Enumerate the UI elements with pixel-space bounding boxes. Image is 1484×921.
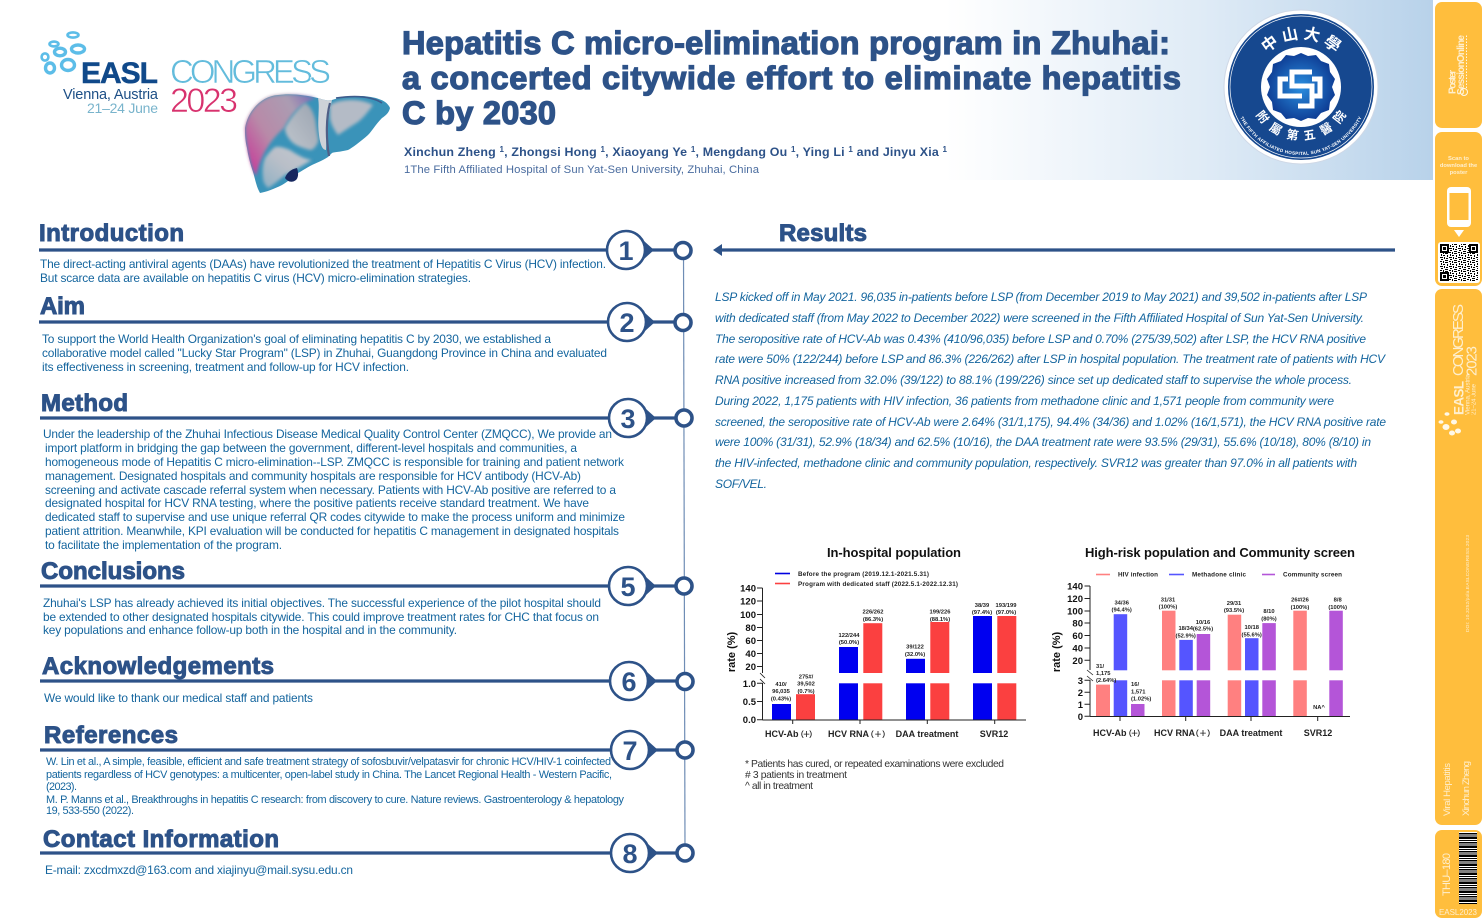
data labels: (50.0%)	[839, 640, 859, 646]
data labels: NA^	[1313, 705, 1325, 711]
data labels: 199/226	[930, 610, 951, 616]
section marker 6	[40, 662, 693, 700]
chart title: In-hospital population	[827, 545, 961, 560]
header background band	[0, 0, 1433, 180]
text: references list	[46, 756, 625, 817]
x axis: HCV RNA	[828, 729, 870, 739]
text: conclusions body	[43, 596, 601, 637]
y axis: rate (%)	[1051, 631, 1063, 672]
authors: 1	[791, 145, 796, 154]
panel: results	[713, 220, 1395, 491]
data labels: 38/39	[975, 603, 990, 609]
icon: Sun Yat-Sen University hospital emblem: 五	[1302, 127, 1317, 143]
authors: 1	[943, 145, 948, 154]
data labels: 16/	[1131, 682, 1139, 688]
legend: Community screen	[1283, 572, 1342, 578]
data labels: (0.7%)	[797, 689, 815, 695]
text: method body	[43, 427, 625, 552]
heading: aim: Aim	[40, 293, 85, 320]
data labels: (52.9%)	[1176, 634, 1196, 640]
text: references list: patients regardless of HCV genotypes: a multicenter, open-label study in China. The Lancet Regional Health - Western Pacific,	[46, 769, 612, 781]
footnotes	[745, 759, 1004, 792]
emblem symbol	[1280, 72, 1320, 106]
title	[402, 25, 1181, 131]
x axis: （＋）	[866, 730, 890, 739]
icon: Sun Yat-Sen University hospital emblem: 大	[1302, 25, 1322, 46]
text: method body: homogeneous mode of Hepatitis C micro-elimination--LSP. ZMQCC is responsible for training and patient network	[45, 455, 624, 469]
title: C by 2030	[402, 95, 556, 131]
section marker 5	[40, 567, 692, 605]
section marker 8	[40, 834, 693, 872]
data labels: 39,502	[797, 682, 815, 688]
text: introduction body: The direct-acting antiviral agents (DAAs) have revolutionized the treatment of Hepatitis C Virus (HCV) infection.	[40, 257, 606, 271]
legend: HIV infection	[1118, 572, 1158, 578]
text: results body: During 2022, 1,175 patients with HIV infection, 36 patients from methadone clinic and 1,571 people from community were	[715, 394, 1334, 408]
data labels: 34/36	[1114, 601, 1130, 607]
timeline connector	[684, 250, 685, 853]
y axis	[726, 584, 765, 726]
data labels: (94.4%)	[1112, 607, 1132, 613]
footnotes: # 3 patients in treatment	[745, 770, 847, 781]
data labels: 31/	[1096, 664, 1104, 670]
y axis: 140	[1067, 582, 1083, 592]
text: references list: W. Lin et al., A simple, feasible, efficient and safe treatment strategy of sofosbuvir/velpatasvir for chronic HCV/HIV-1 coinfected	[46, 756, 611, 768]
heading: acknowledgements: Acknowledgements	[42, 653, 274, 680]
data labels: (32.0%)	[905, 652, 925, 658]
year 2023: 2023	[170, 82, 238, 120]
data labels: 226/262	[863, 610, 883, 616]
panel: congress details	[1435, 289, 1482, 825]
panel: congress details: 21–24 June	[1472, 383, 1478, 415]
data labels: (93.5%)	[1224, 608, 1244, 614]
dates: 21–24 June	[87, 100, 158, 116]
y axis: 0	[1078, 712, 1083, 723]
text: results body: RNA positive increased from 32.0% (39/122) to 88.1% (199/226) since set up dedicated staff to supervise the whole process.	[715, 373, 1352, 387]
panel: poster number and barcode: EASL2023	[1439, 908, 1478, 917]
data labels: 410/	[775, 682, 787, 688]
bars	[1096, 611, 1343, 716]
y axis: 120	[1067, 594, 1083, 605]
data labels: 26#/26	[1291, 598, 1310, 604]
text: method body: designated hospital for HCV RNA testing, where the positive patients receive standard treatment. We have	[45, 496, 589, 510]
text: method body: Under the leadership of the Zhuhai Infectious Disease Medical Quality Control Center (ZMQCC), We provide an	[43, 427, 612, 441]
panel: congress details: DOI: 10.3252/pola.EASLCONGRESS.2023	[1465, 535, 1471, 632]
text: results body: with dedicated staff (from May 2022 to December 2022) were screened in the Fifth Affiliated Hospital of Sun Yat-Sen University.	[715, 311, 1364, 325]
EASL wordmark: EASL	[81, 57, 158, 90]
text: results body: rate were 50% (122/244) before LSP and 86.3% (226/262) after LSP in hospital population. The treatment rate of patients with HCV	[715, 352, 1386, 366]
panel: acknowledgements	[40, 653, 693, 705]
sidebar: EASL poster tab	[1435, 2, 1482, 918]
panel: scan to download	[1435, 132, 1482, 286]
text: conclusions body: Zhuhai's LSP has already achieved its initial objectives. The successful experience of the pilot hospital should	[43, 596, 601, 610]
text: method body: import platform in bridging the gap between the government, different-level hospitals and communities, a	[45, 441, 577, 455]
y axis	[1051, 582, 1093, 723]
legend	[1096, 572, 1342, 578]
icon: Sun Yat-Sen University hospital emblem	[1224, 10, 1378, 164]
authors: , Mengdang Ou	[695, 145, 791, 159]
legend: Program with dedicated staff (2022.5.1-2022.12.31)	[798, 581, 958, 588]
section marker 2: 2	[619, 308, 635, 338]
data labels: 96,035	[772, 689, 791, 695]
panel: poster session online	[1435, 2, 1482, 128]
authors: 1	[848, 145, 853, 154]
data labels: 18/34	[1178, 626, 1194, 632]
y axis: 80	[1072, 618, 1083, 630]
x axis: HCV-Ab	[765, 729, 799, 739]
section marker 1: 1	[618, 236, 634, 266]
bar chart: in-hospital population	[726, 545, 1026, 739]
panel: references	[40, 722, 693, 817]
data labels: 193/199	[996, 603, 1017, 609]
panel: aim	[39, 293, 691, 374]
data labels: 39/122	[906, 644, 924, 650]
y axis: 40	[1072, 644, 1083, 654]
icon: Sun Yat-Sen University hospital emblem: 院	[1330, 108, 1349, 126]
data labels: (100%)	[1291, 605, 1309, 611]
section marker 8: 8	[622, 839, 638, 869]
y axis: 140	[740, 584, 756, 594]
data labels: 275#/	[799, 674, 814, 680]
text: results body: screened, the seropositive rate of HCV-Ab were 2.64% (31/1,175), 94.4% (34/36) and 1.02% (16/1,571), the HCV RNA positive rate	[715, 415, 1386, 429]
y axis: 40	[745, 649, 756, 660]
authors: , Ying Li	[796, 145, 848, 159]
data labels: 29/31	[1227, 601, 1242, 607]
panel: poster number and barcode	[1435, 830, 1482, 918]
heading: method: Method	[41, 390, 128, 417]
data labels: 10/16	[1196, 620, 1211, 626]
text: method body: management. Designated hospitals and community hospitals are responsible for HCV antibody (HCV-Ab)	[45, 469, 581, 483]
EASL Congress logo	[42, 32, 331, 120]
panel: congress details: 2023	[1464, 346, 1480, 376]
section marker 7: 7	[622, 736, 638, 766]
x axis: （＋）	[796, 730, 816, 739]
bar chart: high-risk population and community screen	[1051, 545, 1355, 738]
y axis: 100	[1067, 606, 1083, 618]
y axis: 120	[740, 596, 756, 608]
y axis: 3	[1078, 676, 1083, 687]
x axis: HCV RNA	[1154, 728, 1196, 738]
y axis: 1	[1078, 700, 1084, 711]
section marker 2	[39, 303, 691, 341]
legend	[775, 571, 958, 588]
text: results body: were 100% (31/31), 52.9% (18/34) and 62.5% (10/16), the DAA treatment rate were 93.5% (29/31), 55.6% (10/18), 80% (8/10) in	[715, 435, 1371, 449]
bars	[772, 616, 1016, 720]
text: conclusions body: be extended to other designated hospitals citywide. This could improve treatment rates for CHC that focus on	[43, 610, 599, 624]
data labels: (55.6%)	[1242, 633, 1262, 639]
panel: scan to download: Scan to	[1448, 156, 1469, 162]
y axis: 20	[745, 662, 756, 673]
text: results body: SOF/VEL.	[715, 477, 767, 491]
text: acknowledgements body: We would like to thank our medical staff and patients	[44, 691, 313, 705]
text: method body: to facilitate the implementation of the program.	[45, 538, 282, 552]
panel: poster session online: SessionOnline	[1456, 35, 1467, 95]
authors: 1	[691, 145, 696, 154]
icon: liver illustration	[245, 94, 390, 193]
x axis: DAA treatment	[1220, 728, 1282, 738]
panel: congress details: Vienna, Austria	[1464, 373, 1472, 415]
data labels: (2.64%)	[1096, 678, 1116, 684]
legend: Methadone clinic	[1192, 572, 1246, 578]
title: Hepatitis C micro-elimination program in Zhuhai:	[402, 25, 1170, 61]
x axis	[762, 720, 1026, 739]
icon: Sun Yat-Sen University hospital emblem: 附	[1253, 108, 1272, 126]
x axis: SVR12	[1304, 728, 1332, 738]
text: results body: the HIV-infected, methadone clinic and community population, respectively. SVR12 was greater than 97.0% in all patients with	[715, 456, 1357, 470]
data labels: 10/18	[1244, 625, 1260, 631]
icon: Sun Yat-Sen University hospital emblem: THE FIFTH AFFILIATED HOSPITAL SUN YAT-SEN UNIVERSITY	[1240, 116, 1362, 155]
data labels: (62.5%)	[1193, 627, 1213, 633]
QR code	[1438, 242, 1480, 283]
panel: congress details: Viral Hepatitis	[1442, 763, 1453, 816]
title: a concerted citywide effort to eliminate hepatitis	[402, 60, 1181, 96]
x axis	[1090, 716, 1350, 738]
panel: congress details: CONGRESS	[1450, 304, 1467, 376]
y axis: 2	[1078, 688, 1083, 699]
panel: method	[40, 390, 692, 552]
text: method body: screening and activate cascade referral system when necessary. Patients with HCV-Ab positive are referred to a	[45, 483, 616, 497]
x axis: HCV-Ab	[1093, 728, 1127, 738]
icon: Sun Yat-Sen University hospital emblem: 第	[1285, 126, 1300, 143]
data labels: (100%)	[1159, 605, 1177, 611]
section marker 3: 3	[620, 404, 636, 434]
icon: Sun Yat-Sen University hospital emblem: 山	[1280, 25, 1300, 46]
section marker 3	[40, 399, 692, 437]
icon: hexagon cluster	[42, 32, 84, 73]
arrow: results header rule	[713, 244, 1395, 256]
section marker 1	[39, 231, 691, 269]
icon: Sun Yat-Sen University hospital emblem: 中	[1258, 32, 1282, 56]
authors: , Xiaoyang Ye	[605, 145, 691, 159]
text: results body	[715, 290, 1386, 491]
data labels: (97.0%)	[996, 610, 1016, 616]
text: introduction body	[40, 257, 606, 285]
text: references list: 19, 533-550 (2022).	[46, 805, 134, 817]
icon: Sun Yat-Sen University hospital emblem: 學	[1320, 32, 1344, 56]
data labels: 1,175	[1096, 671, 1111, 677]
y axis: 60	[745, 636, 756, 647]
panel: contact information	[40, 826, 693, 877]
text: references list: (2023).	[46, 781, 77, 793]
section marker 5: 5	[620, 572, 636, 602]
data labels	[1096, 597, 1347, 711]
text: results body: The seropositive rate of HCV-Ab was 0.43% (410/96,035) before LSP and 0.70% (275/39,502) after LSP, the HCV RNA positive	[715, 332, 1366, 346]
icon: Sun Yat-Sen University hospital emblem: 屬	[1267, 120, 1285, 138]
footnotes: ^ all in treatment	[745, 781, 813, 792]
data labels: (80%)	[1261, 617, 1277, 623]
heading: contact information: Contact Information	[43, 826, 279, 853]
footnotes: * Patients has cured, or repeated examinations were excluded	[745, 759, 1004, 770]
heading: results: Results	[779, 220, 867, 247]
section marker 7	[40, 731, 693, 769]
text: method body: patient attrition. Meanwhile, KPI evaluation will be conducted for hepatitis C management in designated hospitals	[45, 524, 619, 538]
y axis: 60	[1072, 631, 1083, 642]
affiliation: 1The Fifth Affiliated Hospital of Sun Yat-Sen University, Zhuhai, China	[404, 164, 760, 176]
x axis: （＋）	[1124, 729, 1144, 738]
panel: congress details: EASL	[1452, 381, 1466, 415]
data labels: 1,571	[1131, 690, 1146, 696]
chart title: High-risk population and Community screen	[1085, 545, 1355, 560]
panel: congress details: Xinchun Zheng	[1461, 761, 1472, 816]
x axis: SVR12	[980, 729, 1008, 739]
legend: Before the program (2019.12.1-2021.5.31)	[798, 571, 929, 578]
x axis: （＋）	[1191, 729, 1215, 738]
authors: and Jinyu Xia	[853, 145, 942, 159]
heading: introduction: Introduction	[39, 220, 184, 247]
authors: Xinchun Zheng	[404, 145, 496, 159]
icon: hexagon cluster	[1438, 412, 1461, 436]
text: aim body: To support the World Health Organization's goal of eliminating hepatitis C by 2030, we established a	[42, 332, 551, 346]
data labels: (88.1%)	[930, 617, 950, 623]
panel: introduction	[39, 220, 691, 285]
data labels: (1.02%)	[1131, 697, 1151, 703]
text: aim body: collaborative model called "Lucky Star Program" (LSP) in Zhuhai, Guangdong Province in China and evaluated	[42, 346, 607, 360]
authors: 1	[601, 145, 606, 154]
y axis: 100	[740, 610, 756, 621]
data labels: 122/244	[839, 633, 860, 639]
section marker 6: 6	[621, 667, 637, 697]
data labels: 8/10	[1263, 609, 1275, 615]
text: results body: LSP kicked off in May 2021. 96,035 in-patients before LSP (from December 2019 to May 2021) and 39,502 in-patients after LSP	[715, 290, 1367, 304]
panel: poster session online: Poster	[1448, 70, 1458, 94]
panel: poster number and barcode: THU–180	[1441, 853, 1453, 896]
CONGRESS wordmark: CONGRESS	[170, 53, 331, 90]
heading: references: References	[44, 722, 178, 749]
text: method body: dedicated staff to supervise and use unique referral QR codes citywide to make the process uniform and minimize	[45, 510, 625, 524]
panel: scan to download: poster	[1450, 170, 1468, 176]
y axis: 20	[1072, 656, 1083, 667]
panel: conclusions	[40, 558, 692, 637]
icon: Sun Yat-Sen University hospital emblem: 醫	[1317, 120, 1335, 138]
x axis: DAA treatment	[896, 729, 958, 739]
data labels: (0.43%)	[771, 696, 791, 702]
text: introduction body: But scarce data are available on hepatitis C virus (HCV) micro-elimination strategies.	[40, 271, 471, 285]
heading: conclusions: Conclusions	[41, 558, 185, 585]
data labels: (86.3%)	[863, 617, 883, 623]
data labels: (100%)	[1328, 605, 1347, 611]
y axis: 0.5	[743, 697, 757, 708]
location: Vienna, Austria	[63, 87, 159, 103]
data labels: 8/8	[1334, 598, 1343, 604]
authors: 1	[500, 145, 505, 154]
authors: , Zhongsi Hong	[504, 145, 600, 159]
icon: down arrow	[1454, 230, 1464, 237]
data labels: 31/31	[1161, 597, 1176, 603]
y axis: 80	[745, 623, 756, 634]
data labels: (97.4%)	[972, 610, 992, 616]
text: references list: M. P. Manns et al., Breakthroughs in hepatitis C research: from discovery to cure. Nature reviews. Gastroenterology & hepatology	[46, 794, 625, 806]
y axis: 1.0	[743, 679, 756, 690]
text: aim body	[42, 332, 607, 374]
y axis: 0.0	[743, 715, 756, 726]
text: contact email: E-mail: zxcdmxzd@163.com and xiajinyu@mail.sysu.edu.cn	[45, 863, 353, 877]
text: conclusions body: key populations and enhance follow-up both in the hospital and in the community.	[43, 623, 457, 637]
panel: scan to download: download the	[1440, 163, 1478, 169]
text: aim body: its effectiveness in screening, treatment and follow-up for HCV infection.	[42, 360, 409, 374]
icon: phone	[1447, 187, 1471, 227]
data labels	[771, 603, 1017, 702]
y axis: rate (%)	[726, 631, 738, 672]
